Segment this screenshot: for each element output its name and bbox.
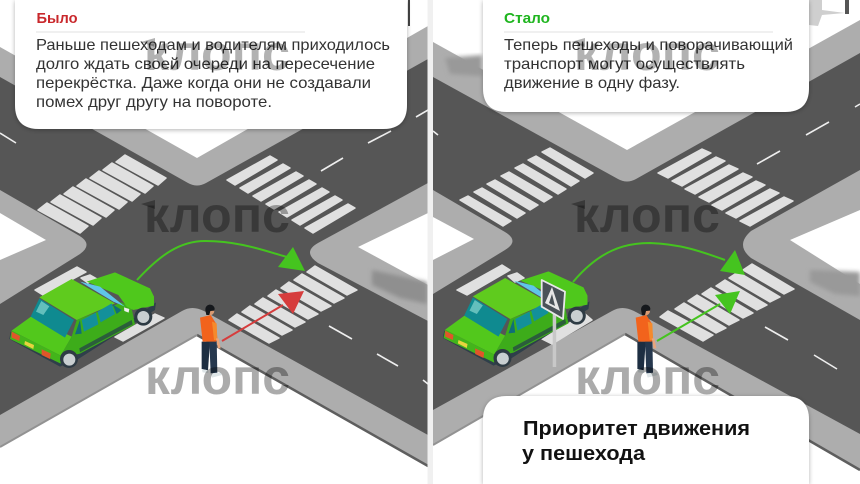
panel: before (Было)	[0, 0, 428, 484]
watermark: right bottom: клопс	[575, 349, 720, 405]
road surface	[0, 59, 428, 435]
crosswalk: top left	[38, 155, 166, 233]
body text: before: перекрёстка. Даже когда они не создавали	[36, 75, 371, 92]
car	[9, 272, 156, 368]
body text: before: помех друг другу на повороте.	[36, 94, 272, 111]
card: conclusion	[483, 396, 809, 484]
body text: after: движение в одну фазу.	[504, 75, 680, 92]
left sidewalk block	[0, 190, 87, 304]
panel divider	[428, 0, 433, 484]
crosswalk: top right	[227, 156, 355, 233]
lamp post	[408, 0, 410, 26]
panel: after (Стало)	[433, 0, 860, 484]
body text: before: долго ждать своей очереди на пересечение	[36, 56, 375, 73]
car	[443, 271, 589, 367]
crosswalk: top left	[460, 148, 593, 226]
crosswalk: bottom left	[457, 265, 592, 344]
crosswalk: top right	[658, 149, 793, 226]
watermark: left bottom: клопс	[145, 349, 290, 405]
watermark: right middle: клопс	[574, 187, 720, 243]
watermark: left top: клопс	[144, 25, 290, 81]
conclusion text: Приоритет движения	[523, 418, 750, 440]
watermark: left middle: клопс	[144, 187, 290, 243]
road sign: pedestrian crossing	[542, 280, 565, 367]
body text: before: Раньше пешеходам и водителям приходилось	[36, 37, 390, 54]
body text: after: транспорт могут осуществлять	[504, 56, 745, 73]
pedestrian	[636, 305, 658, 378]
top sidewalk block	[433, 0, 860, 182]
watermark: right top: клопс	[574, 25, 720, 81]
right sidewalk block	[743, 170, 860, 320]
lane markings	[433, 104, 860, 369]
pedestrian path arrow	[222, 291, 304, 341]
heading: Было: Было	[36, 10, 78, 27]
crosswalk: bottom right	[229, 266, 357, 343]
crosswalk: bottom left	[35, 267, 164, 341]
car path arrow	[137, 241, 305, 280]
car path arrow	[573, 243, 745, 282]
road surface	[433, 53, 860, 434]
card: after	[483, 0, 809, 112]
tree	[809, 0, 849, 26]
left sidewalk block	[433, 190, 512, 294]
card: before	[15, 0, 407, 129]
crosswalk: bottom right	[660, 264, 794, 341]
conclusion text: у пешехода	[522, 443, 646, 465]
top sidewalk block	[0, 0, 428, 186]
right sidewalk block	[310, 183, 428, 321]
lane markings	[0, 110, 428, 384]
bottom sidewalk block	[433, 308, 860, 484]
pedestrian path arrow	[657, 291, 740, 341]
heading: Стало: Стало	[504, 10, 550, 27]
pedestrian	[200, 305, 222, 378]
bottom sidewalk block	[0, 308, 428, 484]
body text: after: Теперь пешеходы и поворачивающий	[504, 37, 793, 54]
